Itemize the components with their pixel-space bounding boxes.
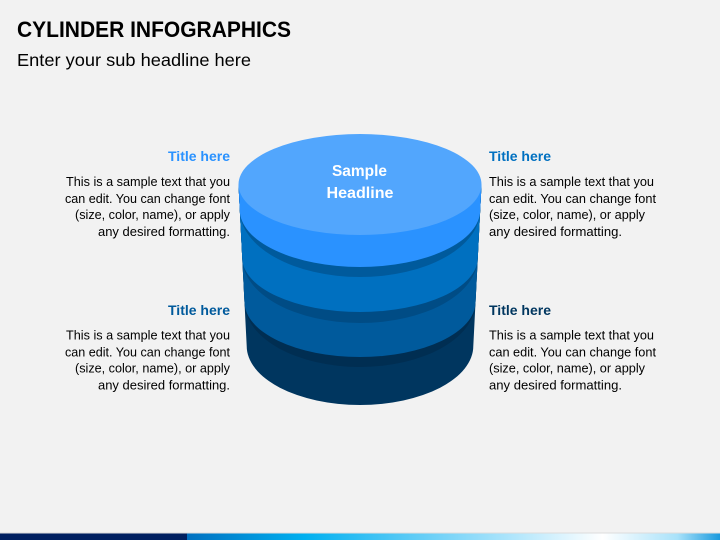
body: top left: any desired formatting. xyxy=(98,225,230,239)
body: bottom left: can edit. You can change font xyxy=(65,346,230,360)
body: bottom right: This is a sample text that you xyxy=(489,328,654,342)
body: bottom left: any desired formatting. xyxy=(98,378,230,392)
body: bottom left: This is a sample text that you xyxy=(66,328,230,342)
body: bottom left xyxy=(65,328,231,392)
body: bottom right: can edit. You can change font xyxy=(489,346,656,360)
body: top right: (size, color, name), or apply xyxy=(489,208,646,222)
center headline xyxy=(326,163,394,202)
text block: top right xyxy=(489,149,656,239)
subtitle: Enter your sub headline here xyxy=(17,50,251,70)
cylinder chart xyxy=(230,134,490,405)
layer 2 shadow xyxy=(238,192,482,323)
body: top left: (size, color, name), or apply xyxy=(75,208,231,222)
footer bar xyxy=(0,532,720,540)
layer 2 xyxy=(238,192,482,312)
center headline: Headline xyxy=(326,185,394,202)
body: bottom right: (size, color, name), or apply xyxy=(489,362,646,376)
heading: top left: Title here xyxy=(168,149,230,165)
body: top left: can edit. You can change font xyxy=(65,192,230,206)
body: bottom right xyxy=(489,328,656,392)
top ellipse xyxy=(238,134,482,235)
title: CYLINDER INFOGRAPHICS xyxy=(17,17,291,42)
text block: bottom right xyxy=(489,303,656,392)
body: top left: This is a sample text that you xyxy=(66,175,230,189)
layer 1 xyxy=(238,185,482,267)
heading: top right: Title here xyxy=(489,149,551,165)
body: bottom right: any desired formatting. xyxy=(489,378,622,392)
layer 4: darkest base xyxy=(238,184,482,405)
body: top right: can edit. You can change font xyxy=(489,192,656,206)
layer 1 shadow xyxy=(238,192,482,277)
body: bottom left: (size, color, name), or apply xyxy=(75,362,231,376)
text block: top left xyxy=(65,149,231,239)
body: top right: any desired formatting. xyxy=(489,225,622,239)
body: top left xyxy=(65,175,231,239)
center headline: Sample xyxy=(332,163,387,180)
layer 3 xyxy=(238,192,482,357)
heading: bottom right: Title here xyxy=(489,303,551,319)
text block: bottom left xyxy=(65,303,231,392)
layer 3 shadow xyxy=(238,192,482,367)
body: top right: This is a sample text that you xyxy=(489,175,654,189)
heading: bottom left: Title here xyxy=(168,303,230,319)
body: top right xyxy=(489,175,656,239)
